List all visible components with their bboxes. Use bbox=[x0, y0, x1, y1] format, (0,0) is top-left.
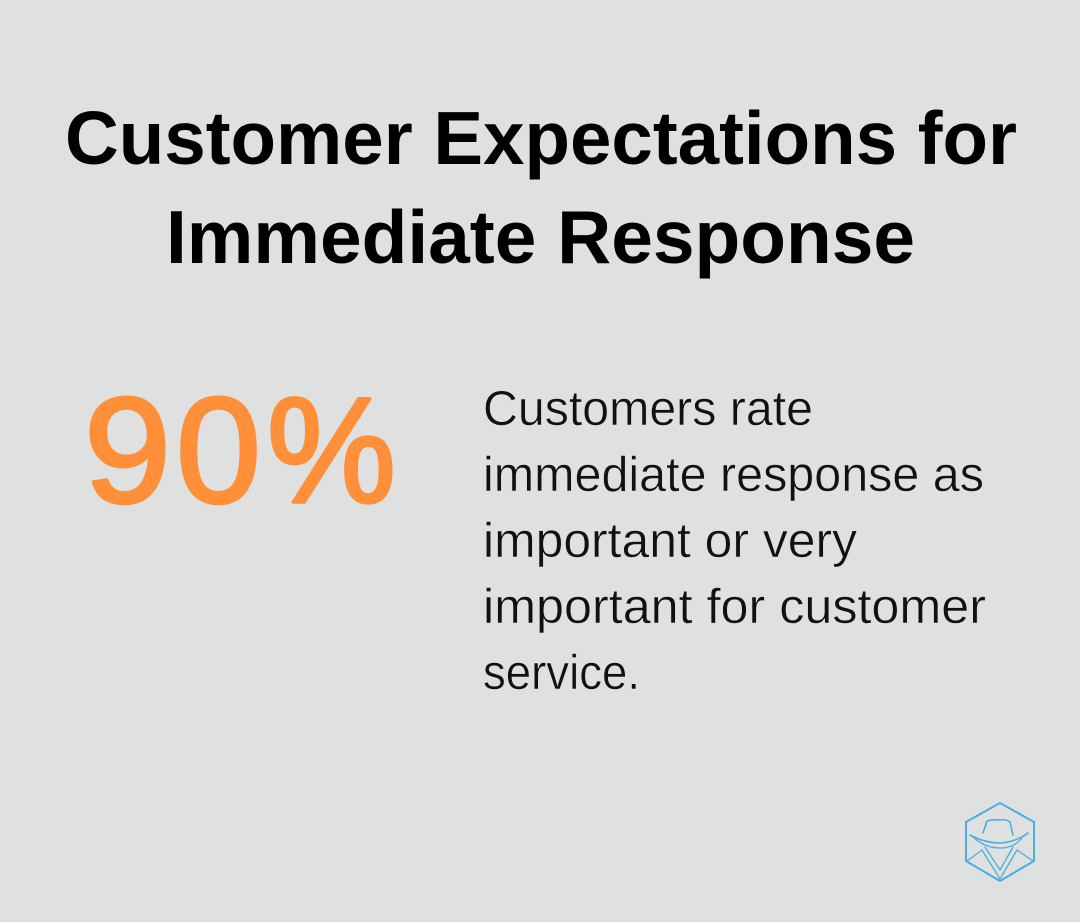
title: Customer Expectations for bbox=[65, 96, 1017, 180]
description text: important for customer bbox=[483, 580, 986, 634]
big statistic: 90%: 0 bbox=[176, 366, 261, 534]
big statistic: 90%: 9 bbox=[84, 366, 171, 534]
title bbox=[65, 96, 1017, 279]
description text: important or very bbox=[483, 514, 858, 568]
description text: Customers rate bbox=[483, 382, 813, 436]
description text bbox=[483, 382, 986, 700]
description text: immediate response as bbox=[483, 448, 984, 502]
big statistic: 90% bbox=[84, 366, 396, 534]
title: Immediate Response bbox=[166, 195, 915, 279]
description text: service. bbox=[483, 646, 640, 700]
big statistic: 90%: % bbox=[267, 366, 396, 534]
icon: logo hexagon with hat and coat bbox=[966, 803, 1034, 881]
